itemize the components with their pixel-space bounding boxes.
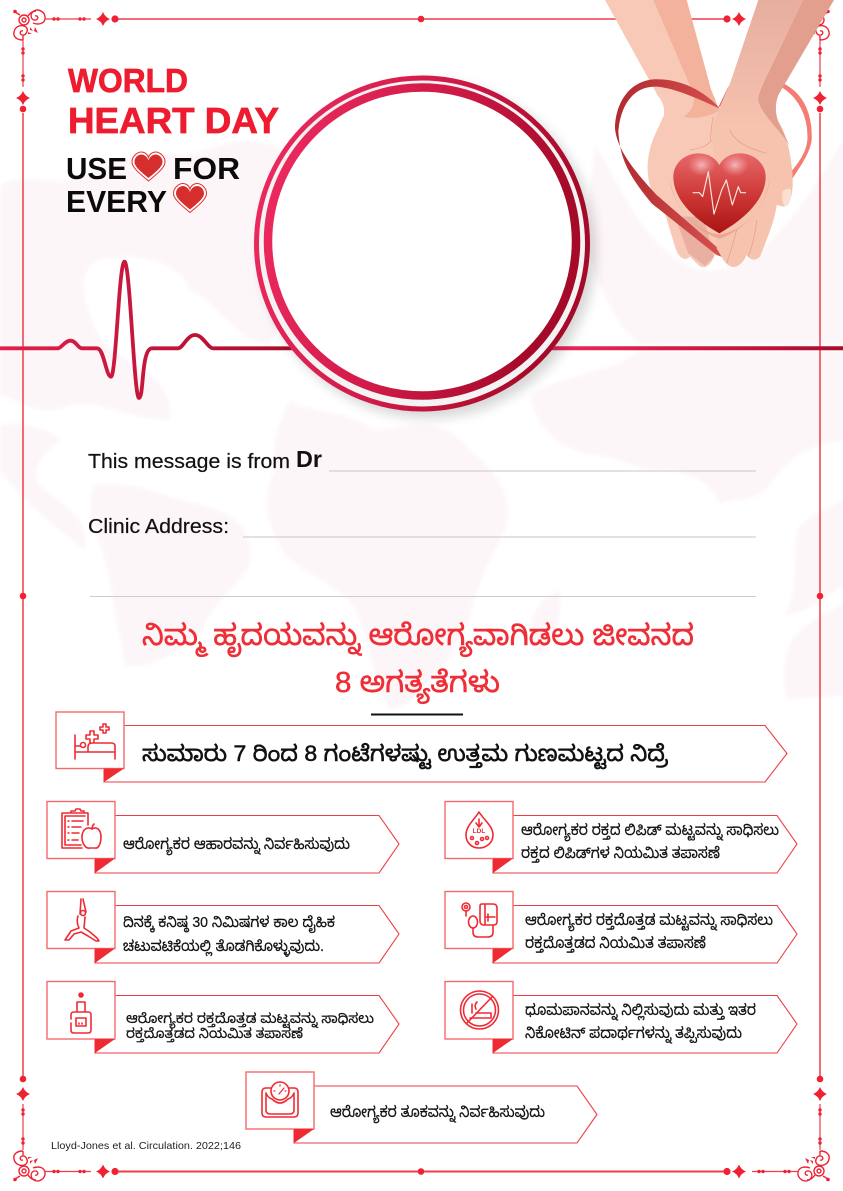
icon: yoga figure: [65, 899, 99, 941]
item: sleep: [56, 712, 787, 782]
citation: Lloyd-Jones et al. Circulation. 2022;146: [51, 1140, 241, 1152]
field: this message is from dr: This message is from: [88, 451, 290, 473]
field: this message is from dr: Dr: [296, 446, 322, 472]
item: physical activity: [47, 892, 399, 963]
item: physical activity: ದಿನಕ್ಕೆ ಕನಿಷ್ಠ 30 ನಿಮಿಷಗಳ ಕಾಲ ದೈಹಿಕ: [123, 915, 335, 933]
item: blood lipids: ಆರೋಗ್ಯಕರ ರಕ್ತದ ಲಿಪಿಡ್ ಮಟ್ಟವನ್ನು ಸಾಧಿಸಲು: [521, 822, 779, 842]
icon: blood pressure cuff: [462, 903, 497, 937]
pulse line: [0, 262, 843, 398]
title: world heart day: WORLD: [68, 62, 188, 99]
item: blood sugar: ರಕ್ತದೊತ್ತಡದ ನಿಯಮಿತ ತಪಾಸಣೆ: [126, 1026, 303, 1043]
item: healthy weight: ಆರೋಗ್ಯಕರ ತೂಕವನ್ನು ನಿರ್ವಹಿಸುವುದು: [330, 1104, 545, 1124]
illustration: hands holding heart: [605, 0, 834, 267]
heading: [142, 620, 694, 714]
item: healthy diet: [47, 802, 399, 873]
item: physical activity: ಚಟುವಟಿಕೆಯಲ್ಲಿ ತೊಡಗಿಕೊಳ್ಳುವುದು.: [123, 939, 324, 957]
slogan: use heart for every heart: [66, 151, 240, 219]
field: this message is from dr: [88, 446, 756, 473]
item: blood pressure: ರಕ್ತದೊತ್ತಡದ ನಿಯಮಿತ ತಪಾಸಣೆ: [525, 935, 706, 953]
icon: bed: [75, 724, 115, 759]
photo circle frame: [254, 76, 596, 418]
icon: ldl drop: [466, 812, 493, 848]
icon: weighing scale: [262, 1082, 298, 1117]
icon: checklist and apple: [62, 809, 101, 848]
red heart: [673, 153, 766, 233]
icon: no smoking sign: [460, 991, 498, 1029]
item: no smoking: ಧೂಮಪಾನವನ್ನು ನಿಲ್ಲಿಸುವುದು ಮತ್ತು ಇತರ: [525, 1002, 756, 1021]
item: blood sugar: ಆರೋಗ್ಯಕರ ರಕ್ತದೊತ್ತಡ ಮಟ್ಟವನ್ನು ಸಾಧಿಸಲು: [126, 1011, 374, 1029]
item: blood lipids: ರಕ್ತದ ಲಿಪಿಡ್‌ಗಳ ನಿಯಮಿತ ತಪಾಸಣೆ: [521, 845, 720, 863]
slogan: use heart for every heart: FOR: [173, 151, 240, 186]
item: blood pressure: ಆರೋಗ್ಯಕರ ರಕ್ತದೊತ್ತಡ ಮಟ್ಟವನ್ನು ಸಾಧಿಸಲು: [525, 912, 773, 932]
ribbon left side: [615, 79, 725, 257]
item: healthy weight: [246, 1072, 597, 1143]
world map background: [0, 140, 843, 710]
right hand: [712, 0, 833, 267]
item: blood lipids: LDL: [473, 828, 485, 835]
field: clinic address: Clinic Address:: [88, 516, 229, 538]
item: sleep: ಸುಮಾರು 7 ರಿಂದ 8 ಗಂಟೆಗಳಷ್ಟು ಉತ್ತಮ ಗುಣಮಟ್ಟದ ನಿದ್ರೆ: [142, 741, 668, 770]
heading: ನಿಮ್ಮ ಹೃದಯವನ್ನು ಆರೋಗ್ಯವಾಗಿಡಲು ಜೀವನದ: [142, 620, 694, 657]
heading: 8 ಅಗತ್ಯತೆಗಳು: [335, 667, 500, 704]
left hand: [605, 0, 721, 267]
ecg trace: [693, 172, 746, 214]
item: no smoking: [445, 982, 797, 1053]
icon: glucose meter: [71, 993, 91, 1033]
fingers: [690, 117, 767, 263]
item: blood pressure: [445, 892, 797, 963]
slogan: use heart for every heart: USE: [66, 151, 127, 186]
item: healthy diet: ಆರೋಗ್ಯಕರ ಆಹಾರವನ್ನು ನಿರ್ವಹಿಸುವುದು: [123, 836, 350, 856]
item: no smoking: ನಿಕೋಟಿನ್ ಪದಾರ್ಥಗಳನ್ನು ತಪ್ಪಿಸುವುದು: [525, 1025, 742, 1044]
ribbon right side: [783, 83, 812, 178]
title: world heart day: HEART DAY: [68, 100, 279, 141]
title: world heart day: [68, 62, 279, 141]
item: blood lipids: [445, 802, 797, 873]
item: blood sugar: [47, 982, 399, 1053]
slogan: use heart for every heart: EVERY: [66, 184, 167, 219]
